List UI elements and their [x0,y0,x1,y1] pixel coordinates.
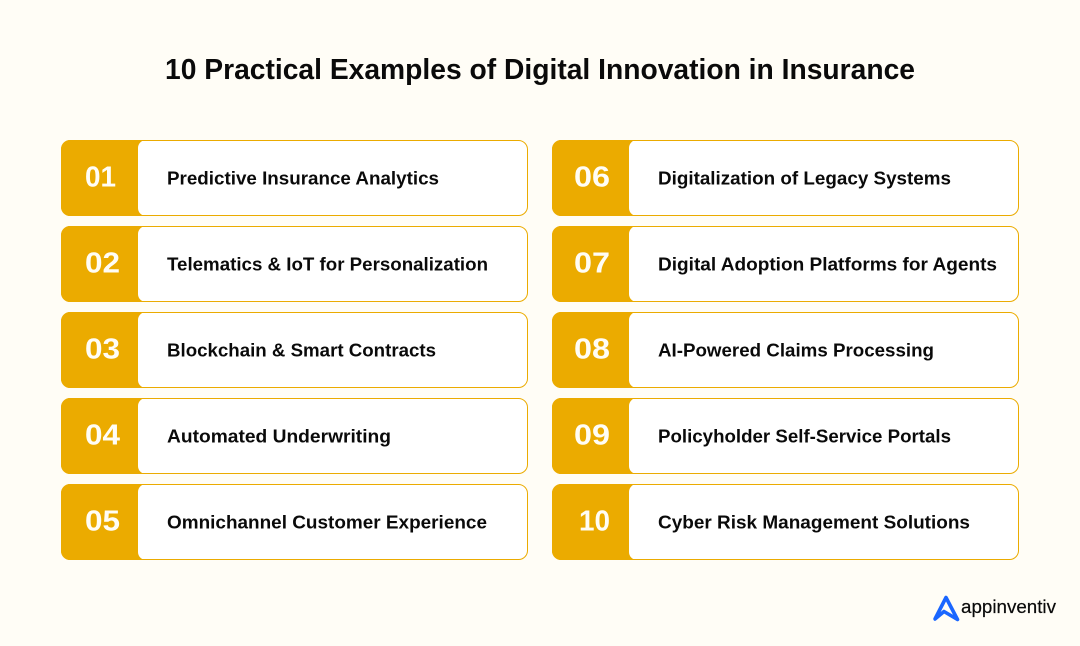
panel: item 04 [61,398,528,474]
title: 10 Practical Examples of Digital Innovation in Insurance [165,54,915,86]
panel: item 08: 08 [574,334,610,366]
panel: item 08: AI-Powered Claims Processing [658,340,934,360]
logo wordmark: appinventiv [961,597,1056,617]
panel: item 01 [61,140,528,216]
panel: item 03: 03 [85,334,120,366]
panel: item 06 [552,140,1018,216]
panel: item 04: Automated Underwriting [167,426,391,446]
panel: item 02: Telematics & IoT for Personalization [167,254,488,274]
panel: item 03 [61,312,528,388]
panel: item 04: 04 [85,420,120,452]
panel: item 01: 01 [85,162,116,194]
panel: item 07 [552,226,1018,302]
panel: item 09: 09 [574,420,610,452]
logo: appinventiv [935,597,1056,620]
panel: item 06: 06 [574,162,610,194]
panel: item 05: Omnichannel Customer Experience [167,512,487,532]
panel: item 08 [552,312,1018,388]
panel: item 01: Predictive Insurance Analytics [167,168,439,188]
panel: item 02: 02 [85,248,120,280]
panel: item 10: Cyber Risk Management Solutions [658,512,970,532]
panel: item 09: Policyholder Self-Service Portals [658,426,951,446]
panel: item 06: Digitalization of Legacy Systems [658,168,951,188]
panel: item 02 [61,226,528,302]
panel: item 05: 05 [85,506,120,538]
panel: item 10: 10 [579,506,610,538]
panel: item 07: 07 [574,248,610,280]
icon: logo arrow [935,598,958,620]
panel: item 09 [552,398,1018,474]
panel: item 10 [552,484,1018,560]
panel: item 07: Digital Adoption Platforms for Agents [658,254,997,274]
panel: item 05 [61,484,528,560]
panel: item 03: Blockchain & Smart Contracts [167,340,436,360]
